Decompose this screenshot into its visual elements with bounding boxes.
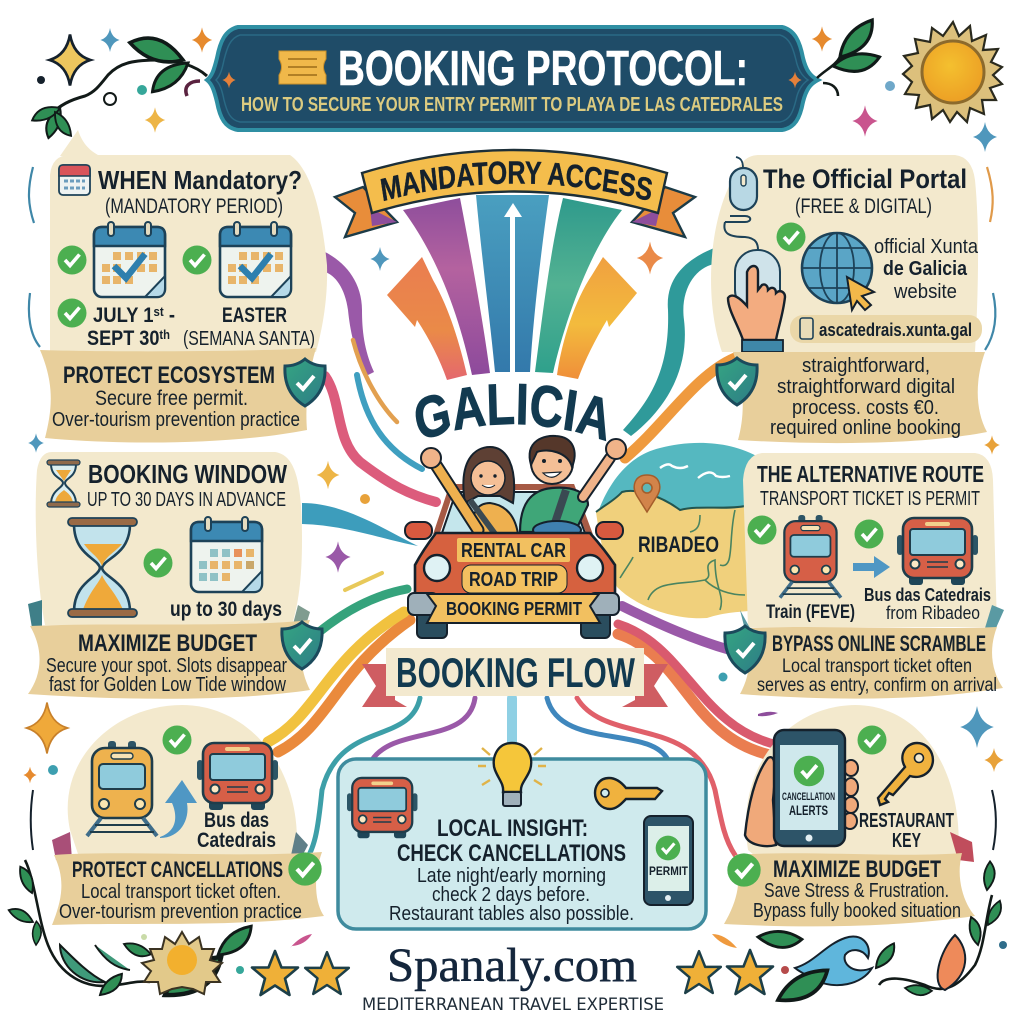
date text: st (154, 304, 164, 319)
icon: permit phone (644, 816, 693, 905)
ribbon: bypass online scramble (725, 605, 1004, 699)
car body (415, 533, 615, 596)
ribbon: protect cancellations (52, 832, 324, 925)
subheading: (FREE & DIGITAL) (795, 195, 932, 218)
icon: train (780, 515, 841, 598)
date text: - (164, 304, 175, 327)
heading: Galicia: GALICIA (416, 384, 606, 442)
caption 1: Bus das (204, 809, 269, 832)
ribbon text: Local transport ticket often (782, 656, 972, 677)
date text 2: SEPT 30 (87, 327, 171, 350)
icon: hand on mouse (724, 216, 785, 352)
ribbon heading: MAXIMIZE BUDGET (773, 856, 941, 883)
caption 2: KEY (892, 830, 921, 852)
ribbon text: Save Stress & Frustration. (764, 880, 949, 902)
ribbon heading: PROTECT CANCELLATIONS (72, 857, 283, 882)
heading 2: CHECK CANCELLATIONS (397, 840, 626, 867)
icons: bottom left stars (252, 951, 349, 995)
ribbon text 2: Bypass fully booked situation (753, 900, 961, 922)
ribbon heading: MAXIMIZE BUDGET (78, 630, 257, 657)
icon: hand (745, 757, 858, 846)
url pill (790, 315, 982, 343)
icon: bus (197, 743, 278, 810)
decorative sparkles and dots in the middle (28, 167, 1000, 682)
icon: bottom sun (142, 932, 222, 994)
ribbon text 2: Over-tourism prevention practice (52, 409, 300, 431)
subheading: UP TO 30 DAYS IN ADVANCE (87, 489, 286, 511)
ribbon text 2: fast for Golden Low Tide window (49, 674, 286, 696)
plate: road trip (462, 565, 567, 593)
icon: phone: ALERTS (789, 802, 828, 818)
Easter text: EASTER (222, 304, 287, 327)
icon: bus (897, 518, 978, 585)
check (727, 853, 761, 887)
headlight left (424, 555, 450, 581)
heading 1: LOCAL INSIGHT: (437, 815, 588, 842)
heading: BOOKING WINDOW (88, 459, 287, 489)
check 1 (748, 516, 776, 544)
shield (717, 358, 757, 405)
check 2 (854, 520, 884, 548)
icon: sun (903, 22, 1002, 122)
wheel left (417, 610, 447, 638)
panel: local insight (338, 743, 706, 929)
caption: train: Train (FEVE) (766, 602, 855, 623)
woman (421, 447, 518, 534)
icon: mouse (730, 157, 757, 210)
flow streams connecting the centre to the panels (268, 248, 778, 866)
check 1 (58, 246, 86, 274)
date text 2: th (159, 327, 170, 342)
sparkle right of rays (637, 242, 663, 274)
date text: JULY 1 (93, 304, 162, 327)
mirror left (405, 522, 432, 539)
icon: map pin (634, 475, 660, 512)
icon: bus (347, 778, 417, 838)
caption: up to 30 days (170, 598, 282, 621)
ribbon heading: PROTECT ECOSYSTEM (63, 362, 275, 389)
caption: bus: Bus das Catedrais (864, 585, 991, 605)
caption 2: Catedrais (197, 829, 276, 852)
text: Ribadeo: RIBADEO (638, 532, 719, 557)
text: official Xunta: official Xunta (874, 236, 979, 258)
check 2 (182, 246, 212, 274)
url pill: ascatedrais.xunta.gal (819, 320, 972, 340)
bumper left (408, 593, 438, 615)
map: Ribadeo (596, 443, 760, 618)
panel: cancellation alerts (745, 705, 959, 860)
ribbon text: Local transport ticket often. (81, 881, 281, 903)
icon: key (878, 743, 933, 805)
plate: booking permit (427, 594, 600, 623)
banner: mandatory access (332, 148, 698, 239)
panel: when mandatory (50, 130, 327, 352)
icon: train (87, 741, 157, 836)
icons: bottom right stars (677, 950, 773, 994)
icon: permit phone: PERMIT (649, 864, 689, 878)
arrow: white upward (504, 203, 522, 372)
subtitle: HOW TO SECURE YOUR ENTRY PERMIT TO PLAYA DE LAS CATEDRALES (241, 94, 783, 116)
panel: alternative route (743, 453, 997, 627)
title banner (207, 27, 818, 130)
illustration: couple in rental car (405, 436, 626, 638)
check (288, 852, 322, 886)
panel: booking window (36, 452, 302, 625)
icon: light bulb (478, 743, 546, 806)
ribbon: maximize budget 2 (724, 832, 975, 926)
icon: calendar Easter (220, 222, 291, 297)
body 1: Late night/early morning (417, 865, 606, 887)
text: website: website (893, 281, 957, 303)
icon: globe (802, 233, 874, 310)
icon: ticket (279, 51, 326, 84)
icon: big hourglass (68, 518, 137, 617)
decoration: top left vine and sparkles (31, 26, 212, 139)
arrow: train to bus (853, 556, 890, 578)
icon: calendar July (94, 222, 165, 297)
ribbon text: straightforward, (802, 355, 930, 377)
arrow: train to bus (160, 780, 197, 838)
decoration: bottom left flourish (8, 702, 312, 999)
banner text: MANDATORY ACCESS (380, 161, 652, 202)
ribbon text: Secure free permit. (95, 387, 248, 410)
ribbon text 2: Over-tourism prevention practice (59, 901, 302, 923)
ribbon: portal process (717, 352, 987, 443)
icon: small calendar (59, 165, 90, 195)
title text: BOOKING PROTOCOL: (338, 42, 748, 96)
brand tagline: MEDITERRANEAN TRAVEL EXPERTISE (362, 995, 664, 1015)
caption: from Ribadeo: from Ribadeo (886, 603, 980, 623)
shield (282, 622, 322, 669)
ribbon: maximize budget (28, 600, 322, 699)
headlight right (577, 555, 603, 581)
icon: banner star right (788, 72, 802, 88)
heading: WHEN Mandatory? (98, 165, 302, 195)
plate: road trip: ROAD TRIP (469, 569, 558, 591)
panel: official portal (711, 155, 982, 352)
heading: The Official Portal (763, 164, 967, 194)
shield (285, 359, 325, 406)
body 3: Restaurant tables also possible. (389, 903, 634, 925)
body 2: check 2 days before. (432, 884, 590, 906)
check (162, 726, 192, 754)
icon: calendar (191, 517, 262, 592)
plate: booking permit: BOOKING PERMIT (446, 599, 582, 619)
ribbon text 2: straightforward digital (777, 376, 955, 398)
wheel right (581, 610, 610, 638)
heading text: BOOKING FLOW (396, 649, 635, 696)
icon: phone: CANCELLATION (782, 791, 835, 803)
brand name: Spanaly.com (387, 939, 637, 992)
windshield (442, 492, 585, 533)
plate: rental car: RENTAL CAR (461, 540, 566, 562)
check (776, 222, 806, 252)
text: de Galicia: de Galicia (883, 258, 968, 280)
decoration: top right vine, sun and sparkles (812, 19, 1002, 152)
caption 1: RESTAURANT (859, 810, 954, 832)
ribbon text 4: required online booking (770, 417, 961, 439)
ribbon: protect ecosystem (40, 348, 325, 443)
check (858, 726, 886, 754)
bumper right (589, 593, 619, 615)
mirror right (596, 522, 623, 539)
icon: small hourglass (47, 460, 80, 507)
icon: banner star left (222, 72, 236, 88)
check (144, 548, 172, 578)
roof frame (436, 487, 590, 535)
panel: protect cancellations (68, 705, 297, 860)
sparkle left of rays (370, 247, 390, 271)
ribbon text 3: process. costs €0. (792, 397, 939, 419)
icon: phone (774, 730, 845, 846)
check 3 (58, 298, 86, 328)
subheading: (MANDATORY PERIOD) (105, 195, 283, 218)
ribbon text: Secure your spot. Slots disappear (46, 655, 287, 677)
decoration: bottom right wave and flourish (712, 706, 1007, 1003)
man (520, 436, 626, 539)
shield (725, 626, 765, 673)
icon: key (595, 778, 662, 809)
Semana Santa text: (SEMANA SANTA) (183, 328, 315, 350)
banner: booking flow (362, 648, 668, 707)
central rainbow rays (387, 195, 637, 380)
